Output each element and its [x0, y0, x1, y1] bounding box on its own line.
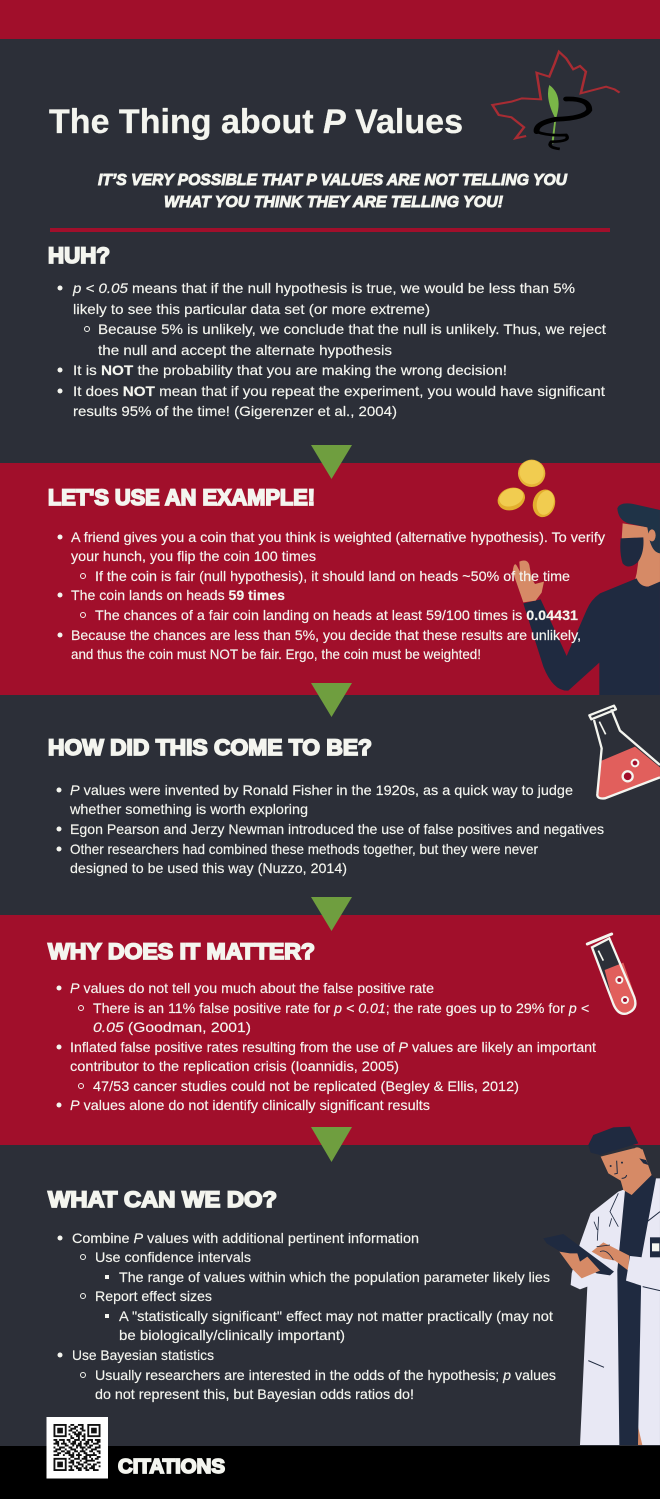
text block: example bullets: Because the chances are less than 5%, you decide that these results are unlikely,: [71, 627, 581, 643]
arrow: green triangle: [311, 1127, 352, 1162]
text block: huh bullets: results 95% of the time! (Gigerenzer et al., 2004): [73, 403, 397, 419]
text block: why it matters bullets: 47/53 cancer studies could not be replicated (Begley & Ellis, 2012): [93, 1078, 519, 1094]
text block: huh bullets: It does NOT mean that if you repeat the experiment, you would have significant: [73, 383, 605, 399]
text block: what can we do bullets: Usually researchers are interested in the odds of the hypothesis; p values: [95, 1367, 556, 1383]
text block: history bullets: P values were invented by Ronald Fisher in the 1920s, as a quick way to judge: [70, 782, 573, 798]
text block: what can we do bullets: [58, 1230, 556, 1402]
text block: what can we do bullets: Use confidence intervals: [95, 1249, 251, 1265]
text block: huh bullets: the null and accept the alternate hypothesis: [98, 342, 392, 358]
icon: test tube: [587, 934, 635, 1014]
text block: huh bullets: It is NOT the probability that you are making the wrong decision!: [73, 362, 507, 378]
text block: example bullets: your hunch, you flip the coin 100 times: [71, 548, 316, 564]
text block: history bullets: [56, 782, 604, 876]
icon: gold coins: [494, 460, 558, 520]
text block: example bullets: [58, 529, 605, 662]
heading: let's use an example: LET'S USE AN EXAMPLE!: [48, 485, 315, 510]
text block: why it matters bullets: There is an 11% false positive rate for p < 0.01; the rate goes up to 29% for p <: [93, 1000, 589, 1016]
panel: why does it matter: [0, 897, 660, 1145]
text block: why it matters bullets: P values alone do not identify clinically significant results: [70, 1097, 430, 1113]
text block: what can we do bullets: do not represent this, but Bayesian odds ratios do!: [95, 1386, 414, 1402]
text block: history bullets: Egon Pearson and Jerzy Newman introduced the use of false positives and negatives: [70, 821, 604, 837]
top red band: [0, 0, 660, 39]
text block: what can we do bullets: Combine P values with additional pertinent information: [72, 1230, 419, 1246]
text block: why it matters bullets: contributor to the replication crisis (Ioannidis, 2005): [70, 1058, 399, 1074]
heading: why does it matter: WHY DOES IT MATTER?: [48, 939, 315, 964]
text block: huh bullets: Because 5% is unlikely, we conclude that the null is unlikely. Thus, we reject: [98, 321, 606, 337]
panel: page header: [0, 0, 660, 463]
text block: why it matters bullets: 0.05 (Goodman, 2001): [93, 1019, 251, 1035]
illustration: man in mask: [513, 503, 660, 695]
subtitle: WHAT YOU THINK THEY ARE TELLING YOU!: [164, 194, 504, 211]
text block: example bullets: and thus the coin must NOT be fair. Ergo, the coin must be weighted!: [71, 646, 481, 662]
text block: why it matters bullets: [56, 980, 596, 1113]
text block: what can we do bullets: The range of values within which the population parameter likely lies: [119, 1269, 550, 1285]
text block: history bullets: whether something is worth exploring: [69, 801, 308, 817]
panel: let's use an example: [0, 445, 660, 695]
arrow: green triangle: [311, 445, 352, 479]
panel: how did this come to be: [0, 683, 660, 915]
arrow: green triangle: [311, 683, 352, 717]
text block: what can we do bullets: A "statistically significant" effect may not matter practically (may not: [119, 1308, 553, 1324]
QR code: [46, 1417, 108, 1478]
text block: example bullets: The coin lands on heads 59 times: [71, 587, 285, 603]
icon: flask: [589, 706, 660, 798]
heading: what can we do: WHAT CAN WE DO?: [48, 1187, 277, 1212]
subtitle: IT’S VERY POSSIBLE THAT P VALUES ARE NOT TELLING YOU: [98, 172, 567, 189]
text block: example bullets: A friend gives you a coin that you think is weighted (alternative hypothesis). To verify: [71, 529, 605, 545]
text block: history bullets: designed to be used this way (Nuzzo, 2014): [70, 860, 347, 876]
text block: huh bullets: likely to see this particular data set (or more extreme): [73, 301, 430, 317]
text block: example bullets: The chances of a fair coin landing on heads at least 59/100 times is 0.04431: [95, 607, 578, 623]
heading: huh: HUH?: [48, 243, 110, 268]
title: The Thing about P Values: [49, 103, 463, 141]
arrow: green triangle: [311, 897, 352, 931]
icon: maple leaf logo with rod and serpent: [492, 52, 620, 149]
heading: how did this come to be: HOW DID THIS COME TO BE?: [48, 735, 372, 760]
panel: what can we do: [0, 1127, 660, 1446]
text block: what can we do bullets: Use Bayesian statistics: [72, 1347, 214, 1363]
heading: citations: CITATIONS: [118, 1456, 225, 1478]
text block: example bullets: If the coin is fair (null hypothesis), it should land on heads ~50% of the time: [95, 568, 570, 584]
subtitle: [98, 172, 567, 211]
text block: huh bullets: [58, 280, 606, 419]
text block: what can we do bullets: Report effect sizes: [95, 1288, 212, 1304]
text block: why it matters bullets: Inflated false positive rates resulting from the use of P values are likely an important: [70, 1039, 596, 1055]
text block: why it matters bullets: P values do not tell you much about the false positive rate: [70, 980, 434, 996]
panel: citations footer: [0, 1417, 660, 1499]
text block: huh bullets: p < 0.05 means that if the null hypothesis is true, we would be less than 5%: [72, 280, 575, 296]
text block: what can we do bullets: be biologically/clinically important): [119, 1327, 345, 1343]
illustration: doctor with tablet: [543, 1127, 660, 1445]
text block: history bullets: Other researchers had combined these methods together, but they were never: [70, 841, 538, 857]
